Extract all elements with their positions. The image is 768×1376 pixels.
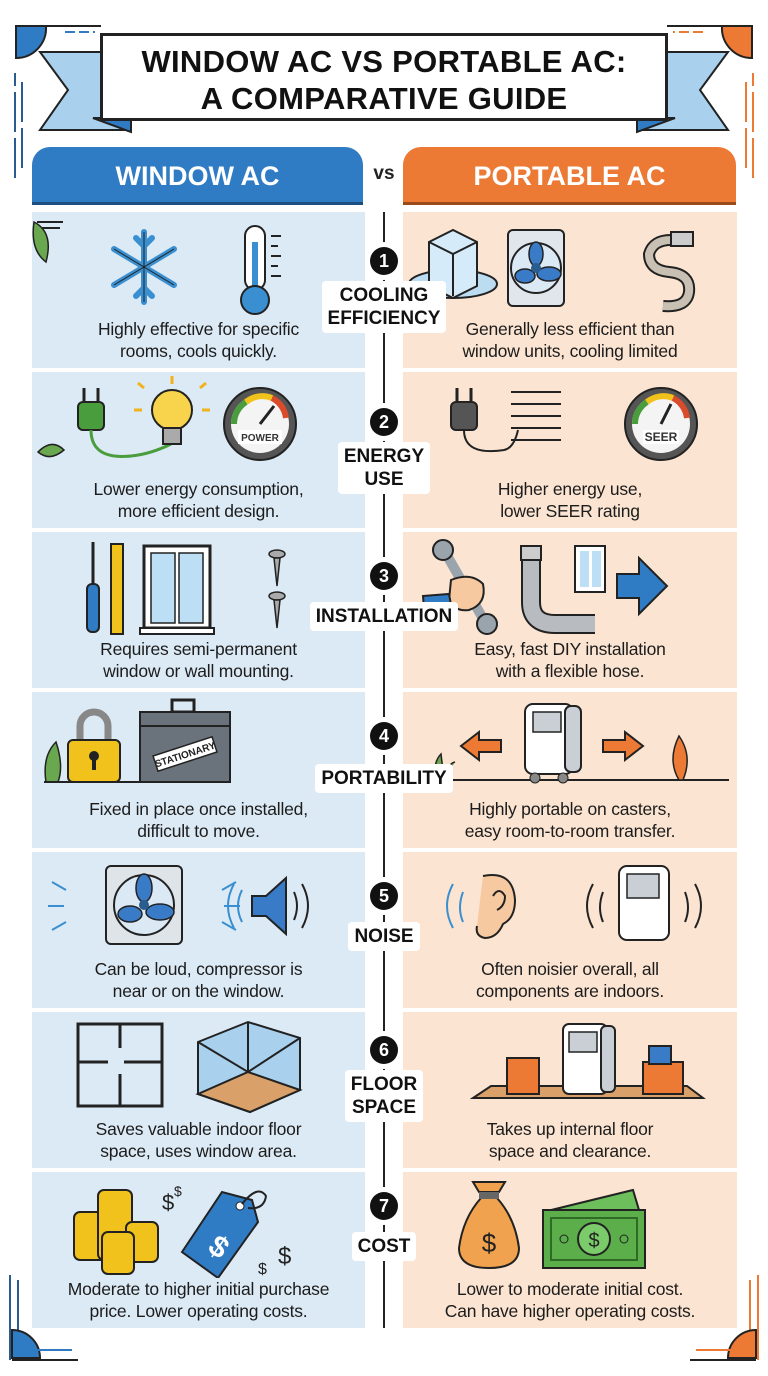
text <box>89 799 308 841</box>
text: more efficient design. <box>118 501 279 521</box>
label: cooling efficiency: EFFICIENCY <box>328 308 440 329</box>
panel: window floor space <box>32 1012 365 1168</box>
icons: plug, lines, seer gauge: SEER <box>645 430 678 444</box>
title text: A COMPARATIVE GUIDE <box>201 81 567 116</box>
icons: floor plan, room corner <box>76 1021 303 1114</box>
text <box>32 1278 365 1322</box>
label: floor space: FLOOR <box>351 1074 417 1095</box>
panel: portable installation <box>403 532 737 688</box>
row 7: cost <box>0 1172 768 1328</box>
icons: screwdriver, level, window, screws <box>86 542 286 635</box>
icons: coin stacks, price tag <box>32 1172 365 1278</box>
text: window units, cooling limited <box>462 341 678 361</box>
text <box>498 479 642 521</box>
label: cooling efficiency <box>322 242 446 333</box>
panel: window noise <box>32 852 365 1008</box>
text: space, uses window area. <box>100 1141 297 1161</box>
icons: coin stacks, price tag: $ <box>162 1190 174 1215</box>
text <box>96 1119 302 1161</box>
vs label: vs <box>373 163 395 184</box>
text <box>487 1119 654 1161</box>
icons: arrows, portable unit, plants <box>434 703 729 784</box>
icons: plug, bulb, power gauge: POWER <box>241 433 280 444</box>
icons: money bag, banknote <box>403 1172 737 1278</box>
title text: WINDOW AC VS PORTABLE AC: <box>141 44 627 79</box>
text <box>465 799 675 841</box>
icons: plug, bulb, power gauge <box>37 376 297 461</box>
text <box>462 319 678 361</box>
row 2: energy use <box>32 372 737 528</box>
label: noise <box>348 877 420 951</box>
icons: hand with wrench, hose, window, arrow <box>422 539 668 635</box>
text: Can have higher operating costs. <box>445 1301 695 1321</box>
text <box>94 479 303 521</box>
panel: portable cooling <box>403 212 737 368</box>
text: Generally less efficient than <box>466 319 674 339</box>
text: Highly effective for specific <box>98 319 299 339</box>
panel: window energy <box>32 372 365 528</box>
text: price. Lower operating costs. <box>90 1301 307 1321</box>
icons: money bag, banknote: $ <box>588 1230 600 1252</box>
text: easy room-to-room transfer. <box>465 821 675 841</box>
icons: coin stacks, price tag: $ <box>174 1183 182 1199</box>
icons: floor, boxes, portable unit <box>470 1023 706 1099</box>
icons: leaf, padlock, stationary box <box>44 698 231 783</box>
label: cost <box>294 1192 474 1261</box>
text: Often noisier overall, all <box>481 959 659 979</box>
panel: window cooling <box>32 212 365 368</box>
panel: portable floor space <box>403 1012 737 1168</box>
label: energy use: ENERGY <box>344 446 424 467</box>
icons: fan unit, speaker <box>48 865 309 945</box>
label: installation <box>310 557 458 631</box>
text <box>474 639 666 681</box>
row 5: noise <box>32 852 737 1008</box>
text: with a flexible hose. <box>496 661 644 681</box>
label: energy use <box>338 403 430 494</box>
text <box>403 1278 737 1322</box>
icons: leaf, snowflake, thermometer <box>32 220 281 315</box>
text: near or on the window. <box>113 981 284 1001</box>
text: Requires semi-permanent <box>100 639 297 659</box>
text: Lower energy consumption, <box>94 479 303 499</box>
label: portability: PORTABILITY <box>321 768 447 789</box>
label: floor space: 6 <box>379 1040 389 1060</box>
icons: ear, portable unit <box>446 865 702 941</box>
row 4: portability <box>32 692 737 848</box>
text: Can be loud, compressor is <box>95 959 302 979</box>
icons: coin stacks, price tag: $ <box>202 1229 235 1266</box>
header: window ac: WINDOW AC <box>116 161 279 191</box>
text: Higher energy use, <box>498 479 642 499</box>
icons: leaf, padlock, stationary box: STATIONARY <box>154 740 217 770</box>
panel: window installation <box>32 532 365 688</box>
panel: portable portability <box>403 692 737 848</box>
text: Lower to moderate initial cost. <box>457 1279 683 1299</box>
icons: plug, lines, seer gauge <box>450 387 698 461</box>
label: floor space: SPACE <box>352 1097 416 1118</box>
panel: window portability <box>32 692 365 848</box>
label: cost: COST <box>358 1236 410 1257</box>
decorative corner: bottom left <box>9 1275 78 1361</box>
text: difficult to move. <box>137 821 260 841</box>
text <box>476 959 664 1001</box>
label: cooling efficiency: 1 <box>379 251 389 271</box>
panel: portable noise <box>403 852 737 1008</box>
decorative corner: top left <box>14 25 101 178</box>
label: noise: 5 <box>379 886 389 906</box>
panel: portable cost <box>403 1172 737 1328</box>
text: Easy, fast DIY installation <box>474 639 666 659</box>
text <box>100 639 297 681</box>
label: installation: INSTALLATION <box>316 606 452 627</box>
text <box>98 319 299 361</box>
row 1: cooling efficiency <box>32 212 737 368</box>
text: components are indoors. <box>476 981 664 1001</box>
label: portability: 4 <box>379 726 389 746</box>
label: cost: 7 <box>379 1196 389 1216</box>
title text <box>100 33 668 121</box>
header: window ac <box>32 147 363 205</box>
header: portable ac <box>403 147 736 205</box>
label: energy use: 2 <box>379 412 389 432</box>
icons: money bag, banknote: $ <box>482 1228 497 1258</box>
label: installation: 3 <box>379 566 389 586</box>
label: noise: NOISE <box>354 926 414 947</box>
icons: coin stacks, price tag: $ <box>258 1261 267 1278</box>
title banner <box>38 33 730 134</box>
text: Fixed in place once installed, <box>89 799 308 819</box>
text: lower SEER rating <box>500 501 640 521</box>
text: space and clearance. <box>489 1141 651 1161</box>
decorative corner: bottom right <box>690 1275 759 1361</box>
row 3: installation <box>32 532 737 688</box>
decorative corner: top right <box>667 25 754 178</box>
panel: window cost <box>32 1172 365 1328</box>
text: Moderate to higher initial purchase <box>68 1279 329 1299</box>
text: window or wall mounting. <box>103 661 294 681</box>
label: floor space <box>294 1036 474 1122</box>
text: Takes up internal floor <box>487 1119 653 1139</box>
label: portability <box>315 717 453 793</box>
label: cooling efficiency: COOLING <box>340 285 428 306</box>
icons: ice cube, fan, hose <box>408 228 696 312</box>
text: Highly portable on casters, <box>469 799 671 819</box>
panel: portable energy <box>403 372 737 528</box>
label: energy use: USE <box>364 469 404 490</box>
header: portable ac: PORTABLE AC <box>474 161 666 191</box>
row 6: floor space <box>32 1012 737 1168</box>
text <box>95 959 302 1001</box>
text: Saves valuable indoor floor <box>96 1119 301 1139</box>
icons: coin stacks, price tag: $ <box>278 1243 291 1270</box>
center divider line <box>383 212 385 1328</box>
text: rooms, cools quickly. <box>120 341 277 361</box>
